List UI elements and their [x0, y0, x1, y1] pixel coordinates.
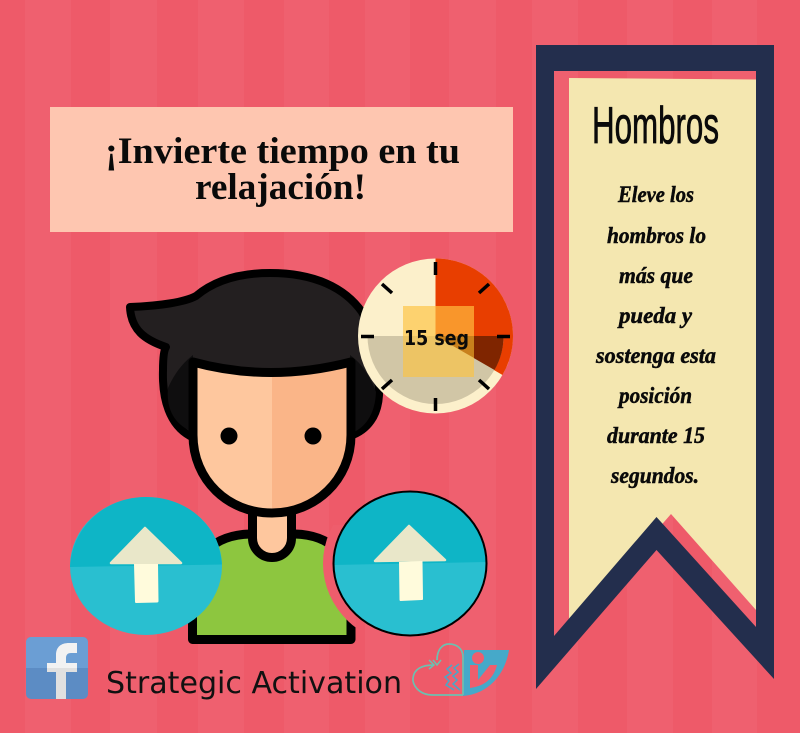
ribbon instructions: Eleve los — [617, 182, 694, 207]
title banner — [50, 107, 513, 232]
title banner: ¡Invierte tiempo en tu — [105, 131, 460, 172]
ribbon instructions: durante 15 — [607, 423, 705, 448]
man hair — [130, 273, 379, 436]
ribbon instructions: más que — [619, 263, 693, 288]
panel: ribbon bookmark — [536, 45, 774, 689]
ribbon instructions — [595, 182, 716, 488]
ribbon navy frame — [536, 45, 774, 689]
icon: heart logo — [413, 644, 509, 696]
icon: stopwatch 15 seg: 15 seg — [404, 326, 469, 350]
ribbon instructions: hombros lo — [607, 223, 706, 248]
icon: stopwatch 15 seg — [358, 258, 513, 414]
ribbon heading: Hombros — [592, 97, 719, 155]
icon: facebook — [26, 637, 88, 699]
ribbon instructions: segundos. — [610, 463, 699, 488]
ribbon cream paper — [569, 78, 756, 630]
shirt gap around right circle — [323, 538, 356, 628]
ribbon instructions: pueda y — [617, 303, 693, 328]
icon: left up arrow circle — [70, 497, 222, 635]
ribbon instructions: sostenga esta — [595, 343, 716, 368]
man face — [193, 362, 351, 513]
footer label: Strategic Activation — [106, 666, 402, 701]
title banner: relajación! — [195, 167, 366, 208]
ribbon instructions: posición — [617, 383, 692, 408]
illustration: man — [130, 273, 379, 640]
man neck — [252, 510, 292, 558]
icon: right up arrow circle — [334, 492, 486, 636]
man shirt — [192, 534, 351, 640]
